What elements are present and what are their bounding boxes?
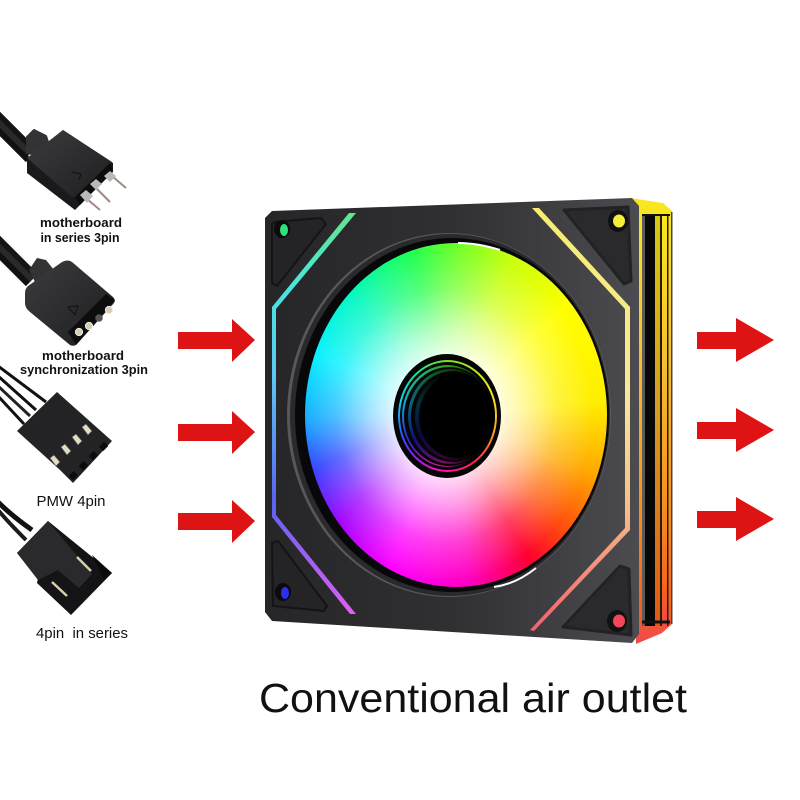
screw: bottom left (275, 583, 291, 601)
arrow: right middle (697, 408, 774, 452)
label: PMW 4pin: PMW 4pin (36, 494, 106, 510)
label: motherboard in series 3pin: motherboard (40, 216, 122, 230)
label: motherboard in series 3pin (40, 216, 122, 245)
infinity mirror hub (393, 354, 501, 478)
arrow: right top (697, 318, 774, 362)
LED strip: right (530, 208, 630, 631)
label: 4pin in series: 4pin in series (36, 626, 128, 642)
fan front frame (265, 198, 639, 643)
corner plate: bottom right (563, 566, 631, 635)
arrow: left top (178, 319, 255, 362)
label: motherboard in series 3pin: in series 3pin (40, 231, 120, 245)
corner plate: bottom left (272, 541, 327, 611)
caption: Conventional air outlet: Conventional air outlet (259, 675, 688, 721)
connector: 4pin in series (0, 502, 112, 615)
RGB fan blades disc (305, 243, 607, 587)
screw: top left (274, 220, 290, 238)
fan (265, 198, 672, 644)
connector: motherboard synchronization 3pin (0, 238, 115, 346)
screw: top right (608, 210, 628, 232)
connector: motherboard in series 3pin (0, 114, 126, 210)
label: motherboard synchronization 3pin (20, 349, 148, 377)
arrow: right bottom (697, 497, 774, 541)
label: motherboard synchronization 3pin: synchronization 3pin (20, 363, 148, 377)
corner plate: top left (272, 218, 326, 286)
label: motherboard synchronization 3pin: motherboard (42, 349, 124, 363)
connector: PMW 4pin (0, 366, 112, 483)
disc highlights (458, 243, 536, 587)
screw: bottom right (607, 610, 627, 632)
LED strip: left (272, 213, 356, 614)
arrow: left bottom (178, 500, 255, 543)
corner plate: top right (564, 207, 631, 284)
fan bezel (287, 233, 611, 597)
fan side frame (630, 198, 672, 644)
arrow: left middle (178, 411, 255, 454)
